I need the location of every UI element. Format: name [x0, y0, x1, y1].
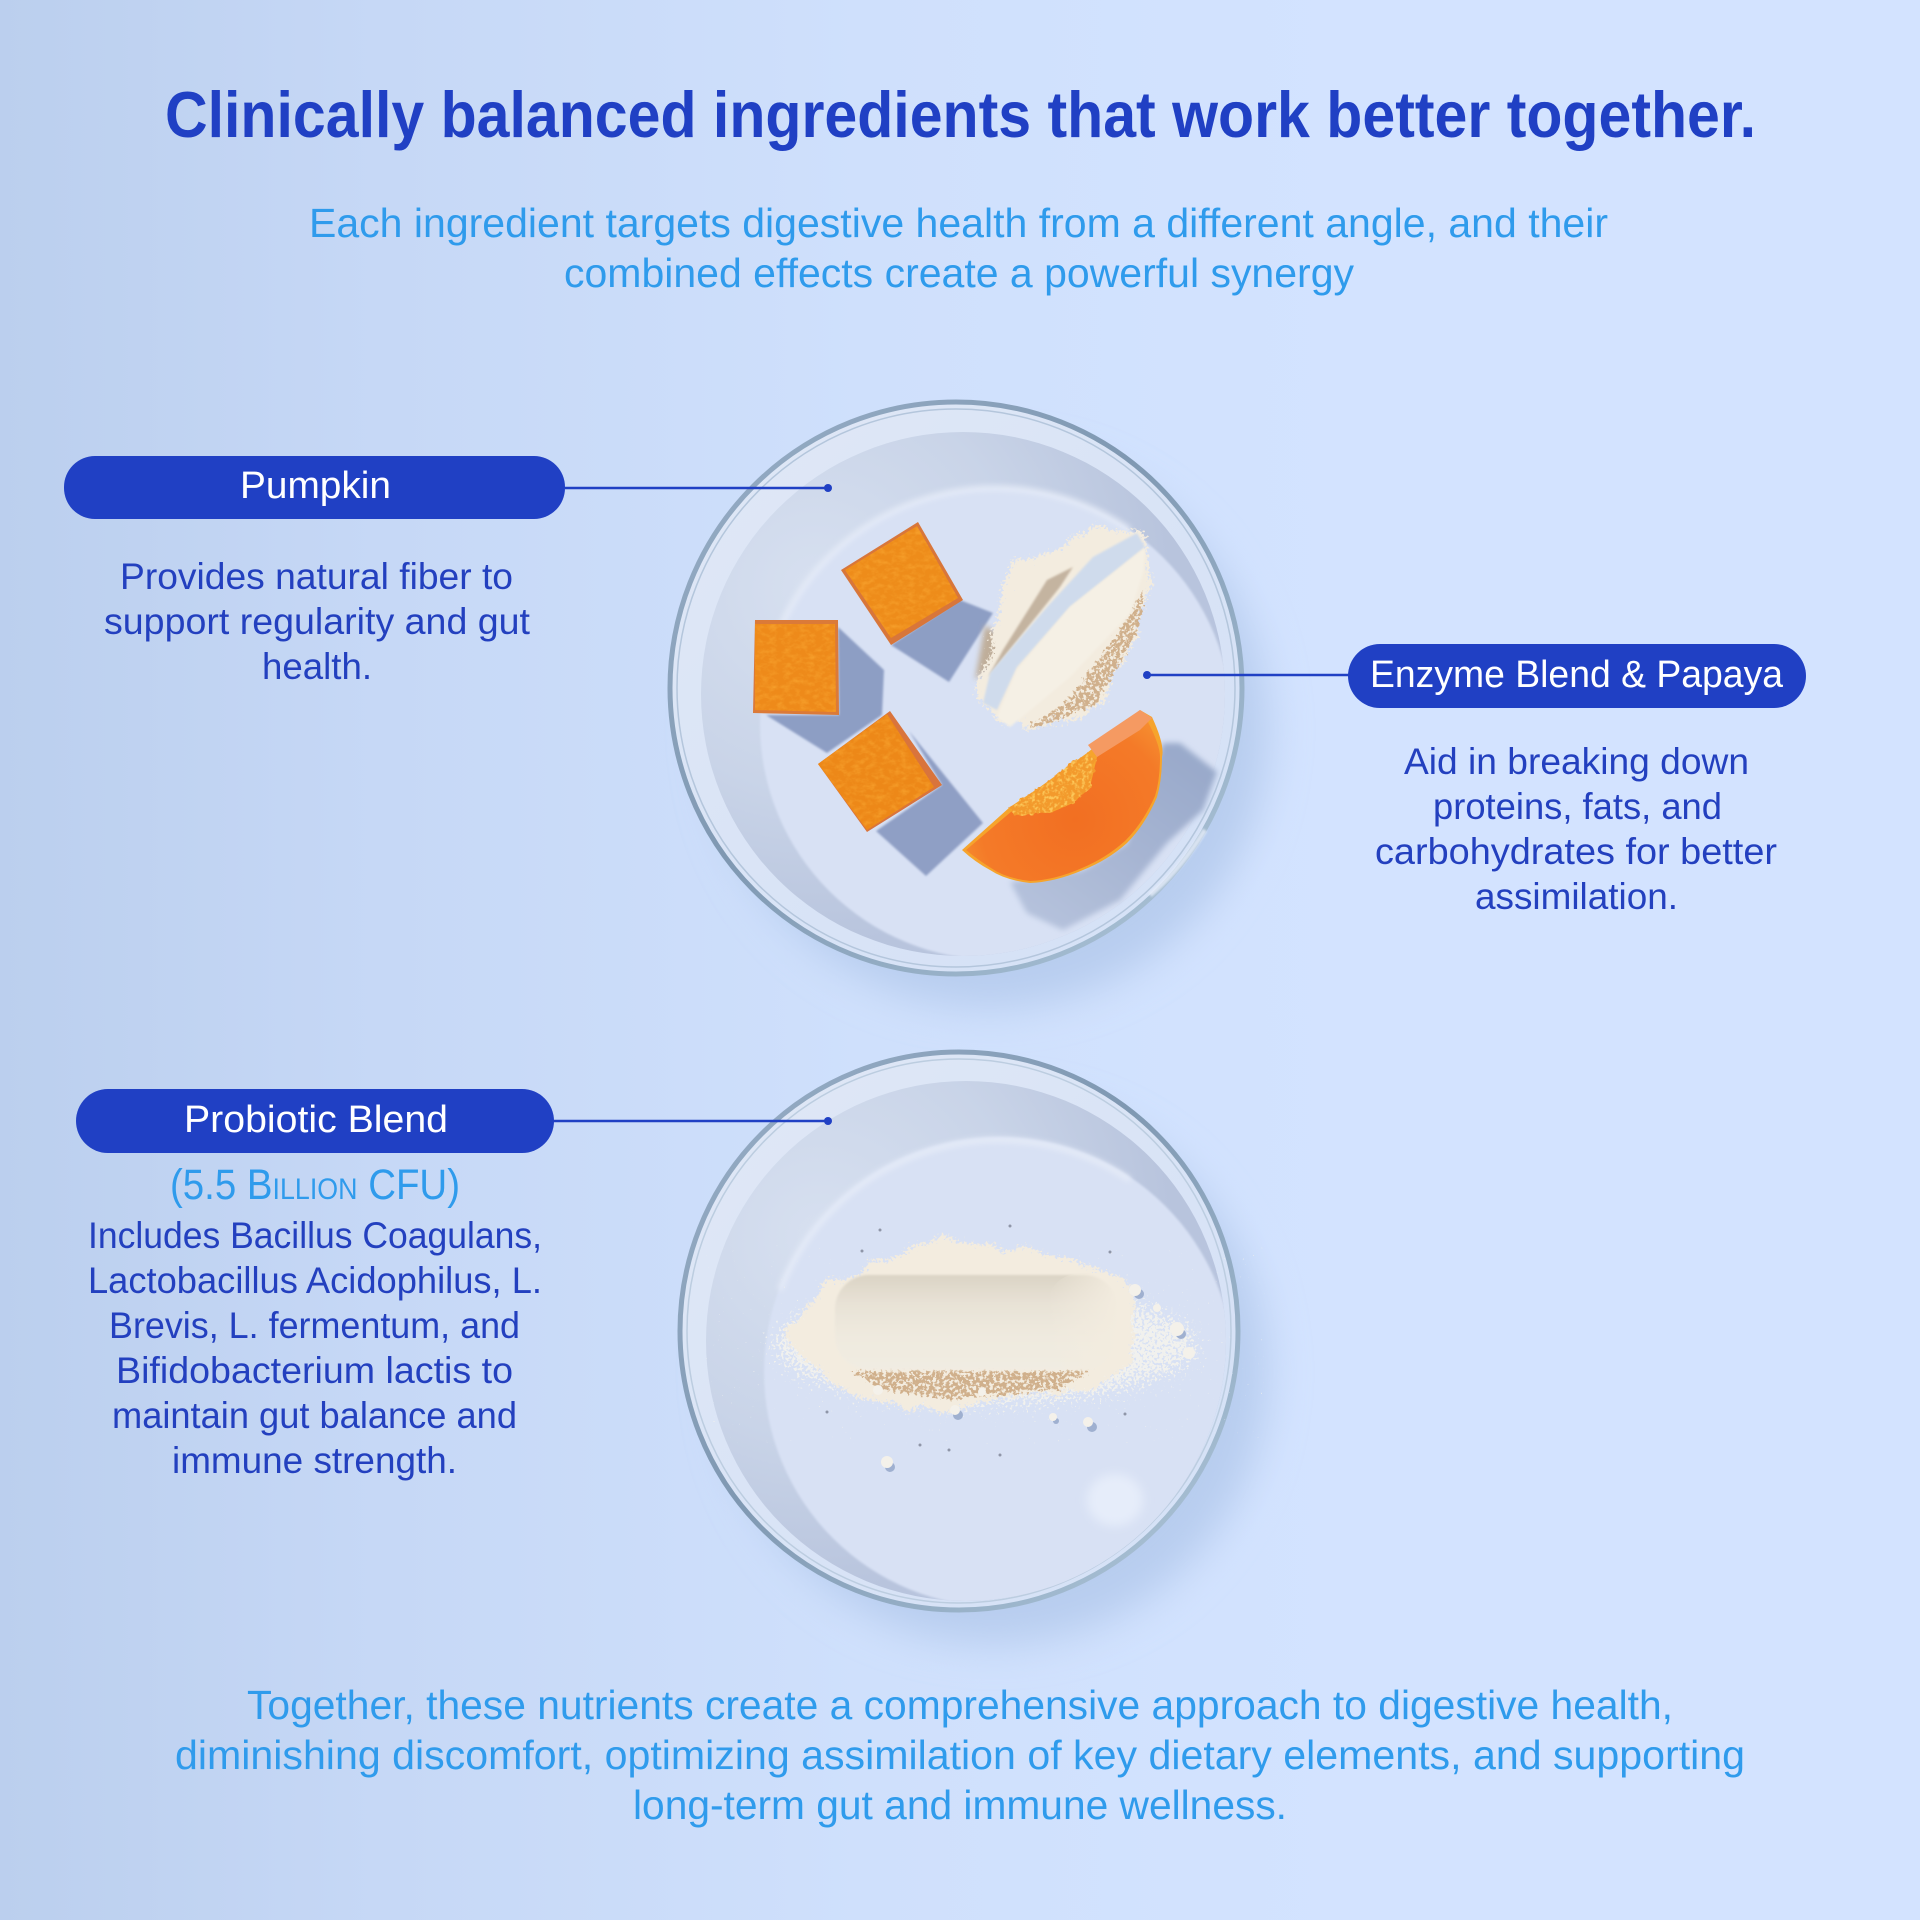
pointer: pumpkin [565, 484, 832, 492]
pill: enzyme blend and papaya: Enzyme Blend & Papaya [1370, 654, 1784, 696]
icon: powder smear [973, 530, 1152, 730]
text: enzyme description: Aid in breaking down [1404, 741, 1749, 782]
text: pumpkin description: Provides natural fiber to [120, 556, 513, 597]
closing statement: long-term gut and immune wellness. [633, 1782, 1287, 1828]
glass highlight [1150, 830, 1205, 895]
panel: enzyme blend callout [1348, 644, 1806, 917]
pill: enzyme blend and papaya [1348, 644, 1806, 708]
closing statement [175, 1682, 1745, 1828]
text: enzyme description: proteins, fats, and [1433, 786, 1722, 827]
dish shadow [723, 1100, 1267, 1644]
text: probiotic description: maintain gut balance and [112, 1395, 517, 1436]
subtitle: combined effects create a powerful synergy [564, 250, 1354, 296]
subtitle: Each ingredient targets digestive health from a different angle, and their [309, 200, 1608, 246]
text: enzyme description [1375, 741, 1777, 917]
text: CFU note: (5.5 Billion CFU) [170, 1161, 460, 1209]
panel: bottom petri dish with probiotic powder [553, 1050, 1267, 1644]
text: pumpkin description: health. [262, 646, 372, 687]
pill: pumpkin: Pumpkin [240, 465, 391, 507]
text: probiotic description: Lactobacillus Acidophilus, L. [88, 1260, 542, 1301]
text: enzyme description: carbohydrates for better [1375, 831, 1777, 872]
text: probiotic description: Brevis, L. fermentum, and [109, 1305, 520, 1346]
powder particles [826, 1224, 1195, 1472]
dish glass [668, 400, 1244, 976]
text: probiotic description [88, 1215, 542, 1481]
text: pumpkin description: support regularity and gut [104, 601, 531, 642]
text: probiotic description: immune strength. [172, 1440, 457, 1481]
icon: powder pile [770, 1232, 1200, 1416]
pointer: enzyme blend [1143, 671, 1350, 679]
cube shadows [766, 600, 993, 876]
panel: top petri dish with pumpkin, powder and papaya [565, 400, 1350, 1008]
text: pumpkin description [104, 556, 531, 687]
dish shadow [712, 452, 1268, 1008]
pill: pumpkin [64, 456, 565, 519]
text: probiotic description: Includes Bacillus Coagulans, [88, 1215, 542, 1256]
icon: pumpkin cube top [841, 522, 963, 645]
text: probiotic description: Bifidobacterium lactis to [116, 1350, 513, 1391]
pill: probiotic blend: Probiotic Blend [184, 1099, 448, 1141]
subtitle [309, 200, 1608, 296]
icon: pumpkin cube bottom [818, 711, 942, 832]
panel: probiotic callout [76, 1089, 554, 1481]
closing statement: Together, these nutrients create a comprehensive approach to digestive health, [247, 1682, 1673, 1728]
icon: papaya slice [962, 710, 1163, 883]
dish glass [678, 1050, 1240, 1612]
icon: pumpkin cube left [753, 620, 839, 715]
panel: pumpkin callout [64, 456, 565, 687]
pill: probiotic blend [76, 1089, 554, 1153]
papaya skin strip [1088, 710, 1152, 757]
closing statement: diminishing discomfort, optimizing assimilation of key dietary elements, and supporting [175, 1732, 1745, 1778]
papaya seed cavity [1010, 752, 1095, 815]
text: enzyme description: assimilation. [1475, 876, 1678, 917]
title: Clinically balanced ingredients that work better together. [165, 78, 1756, 151]
pointer: probiotic blend [553, 1117, 832, 1125]
papaya shadow [1010, 743, 1217, 930]
